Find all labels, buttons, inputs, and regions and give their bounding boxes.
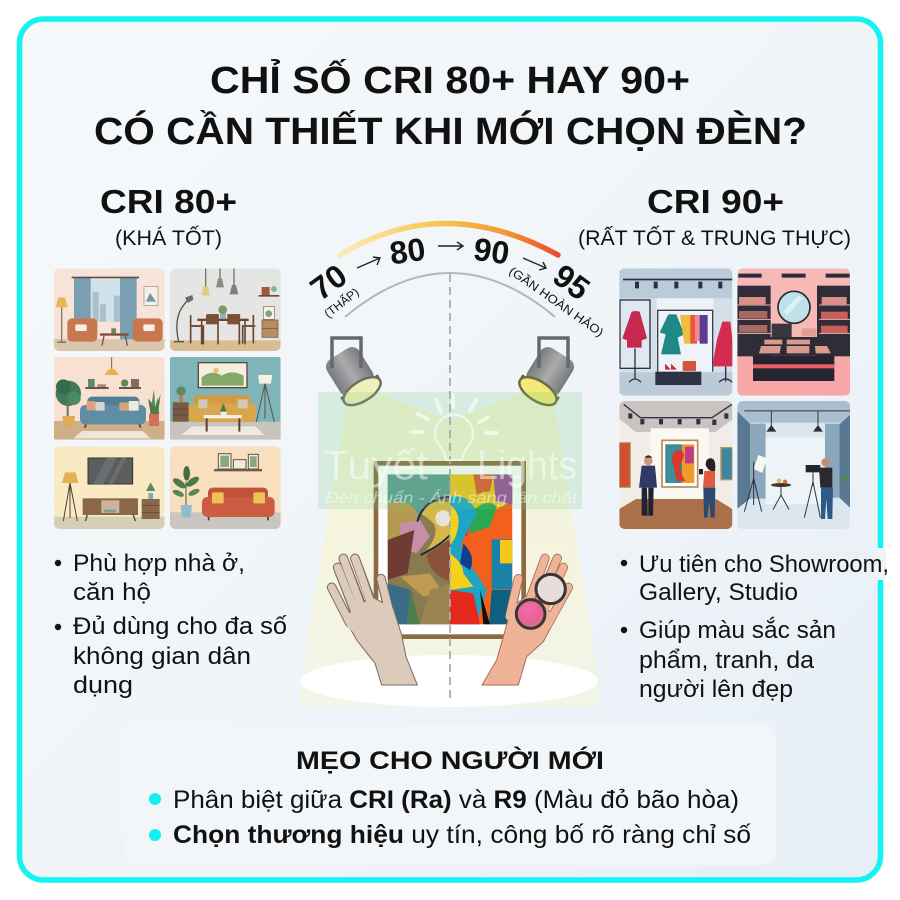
scene: teal wall living room [170, 357, 281, 440]
title: CHỈ SỐ CRI 80+ HAY 90+ [210, 57, 690, 102]
left heading: CRI 80+: (KHÁ TỐT) [115, 226, 222, 250]
rating scale gradient arc [340, 224, 558, 255]
light beams [300, 392, 600, 707]
rating labels: (GẦN HOÀN HẢO) [506, 263, 607, 340]
rating labels: (THẤP) [321, 284, 362, 321]
icon: warm right hand holding makeup [482, 558, 568, 685]
watermark: Tuyết Lights: Đèn chuẩn - Ánh sáng tân chất [325, 488, 578, 507]
icon: pale compact [536, 574, 565, 604]
right bullet list: người lên đẹp [639, 676, 793, 703]
rating arrows [357, 242, 546, 270]
painting: low CRI half [388, 474, 451, 624]
panel: tips for beginners [124, 724, 776, 865]
painting: high CRI half [450, 474, 512, 624]
right heading: CRI 90+ [578, 183, 851, 250]
scene: lounge with blue sofa [54, 357, 165, 440]
tip 1: Phân biệt giữa CRI (Ra) và R9 (Màu đỏ bão hòa) [173, 786, 739, 814]
icon: pale left hand [332, 558, 417, 685]
centre dashed divider [449, 274, 451, 700]
tips heading: MẸO CHO NGƯỜI MỚI [296, 745, 604, 775]
icon: blush compact [516, 600, 545, 628]
rating numbers [304, 231, 596, 307]
icon: right spotlight [514, 338, 580, 411]
panel: professional space illustrations [619, 268, 850, 529]
scene: dining room [170, 268, 281, 351]
right bullet list: Giúp màu sắc sản [639, 617, 836, 644]
panel: home interior illustrations [54, 268, 281, 529]
grey arc [345, 273, 555, 317]
picture frame [376, 463, 524, 637]
left bullet list [55, 550, 287, 699]
rating numbers: 90 [471, 231, 512, 271]
watermark: Tuyết Lights [318, 392, 582, 509]
tip 2: Chọn thương hiệu uy tín, công bố rõ ràng chỉ số [173, 821, 751, 849]
scene: cosmetics store [737, 268, 850, 396]
right bullet list [621, 551, 889, 703]
scene: photo studio [737, 401, 850, 529]
title: CÓ CẦN THIẾT KHI MỚI CHỌN ĐÈN? [94, 109, 807, 153]
scene: fashion showroom [619, 268, 734, 396]
right heading: CRI 90+: CRI 90+ [647, 183, 784, 220]
scene: art gallery [619, 401, 732, 529]
right heading: CRI 90+: (RẤT TỐT & TRUNG THỰC) [578, 226, 851, 250]
rating numbers: 95 [546, 257, 596, 307]
right bullet list: phẩm, tranh, da [639, 647, 815, 674]
framed painting, muted left half and vivid right half [332, 463, 568, 685]
left heading: CRI 80+ [100, 183, 237, 250]
scene: media room with television [54, 446, 165, 529]
right bullet list: Ưu tiên cho Showroom, [639, 551, 889, 578]
left bullet list: Phù hợp nhà ở, [73, 550, 245, 577]
left bullet list: căn hộ [73, 579, 151, 606]
left bullet list: Đủ dùng cho đa số [73, 613, 287, 640]
left bullet list: dụng [73, 672, 133, 699]
icon: left spotlight [320, 338, 386, 411]
left heading: CRI 80+: CRI 80+ [100, 183, 237, 220]
watermark: Tuyết Lights: Tuyết [323, 442, 429, 488]
rating labels [321, 263, 607, 340]
title [94, 57, 807, 153]
left bullet list: không gian dân [73, 643, 251, 670]
rating numbers: 70 [304, 257, 354, 307]
scene: coral sofa room [170, 446, 281, 529]
scene: living room with window [54, 268, 165, 351]
rating numbers: 80 [387, 231, 428, 271]
white stage ellipse [300, 655, 598, 707]
right bullet list: Gallery, Studio [639, 579, 798, 606]
watermark: Tuyết Lights: Lights [477, 442, 577, 488]
